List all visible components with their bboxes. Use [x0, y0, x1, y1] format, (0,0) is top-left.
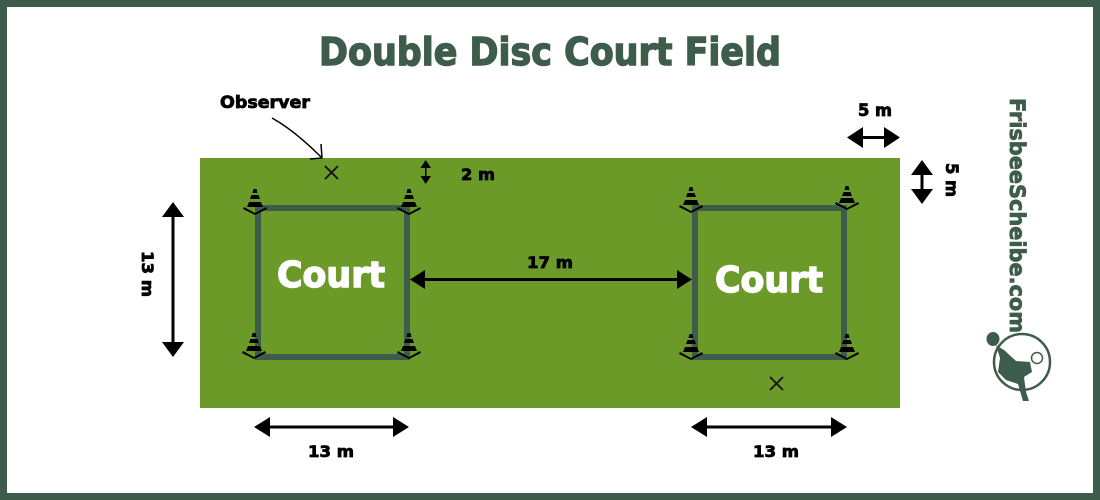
court outline right — [695, 208, 844, 357]
icon: cone bottom left court right — [679, 334, 703, 360]
icon: cone top left court right — [679, 187, 703, 213]
arrow: 13 m vertical — [162, 202, 184, 357]
icon: observer mark left — [325, 166, 338, 179]
court outline left — [258, 208, 407, 357]
label: 5 m horizontal: 5 m — [858, 101, 892, 120]
brand text: FrisbeeScheibe.com — [1004, 98, 1029, 333]
icon: cone bottom right court right — [835, 334, 859, 360]
label: 17 m: 17 m — [527, 253, 573, 272]
title: Double Disc Court Field — [319, 30, 781, 74]
icon: cone top right court right — [835, 186, 859, 210]
arrow: 2 m — [420, 160, 431, 184]
court label left: Court — [277, 255, 385, 296]
observer label: Observer — [220, 93, 311, 112]
icon: cone top right court left — [397, 189, 421, 215]
label: 5 m vertical: 5 m — [942, 163, 961, 197]
arrow: observer pointer — [272, 118, 322, 159]
label: 13 m bottom left: 13 m — [308, 442, 354, 461]
arrow: 17 m distance — [410, 270, 692, 289]
label: 13 m vertical: 13 m — [138, 251, 157, 297]
arrow: 13 m bottom left — [254, 417, 409, 437]
court label right: Court — [715, 260, 823, 301]
arrow: 13 m bottom right — [691, 417, 847, 437]
label: 13 m bottom right: 13 m — [753, 442, 799, 461]
panel: left court — [258, 208, 407, 357]
icon: cone top left court left — [243, 189, 267, 215]
icon: observer mark right — [770, 377, 783, 390]
arrow: 5 m vertical — [911, 160, 933, 204]
icon: cone bottom left court left — [242, 333, 266, 359]
panel: green field — [200, 158, 900, 408]
label: 2 m: 2 m — [461, 165, 495, 184]
icon: cone bottom right court left — [397, 333, 421, 359]
icon: frisbee thrower logo — [986, 332, 1050, 401]
arrow: 5 m horizontal — [847, 127, 900, 148]
panel: right court — [695, 208, 844, 357]
